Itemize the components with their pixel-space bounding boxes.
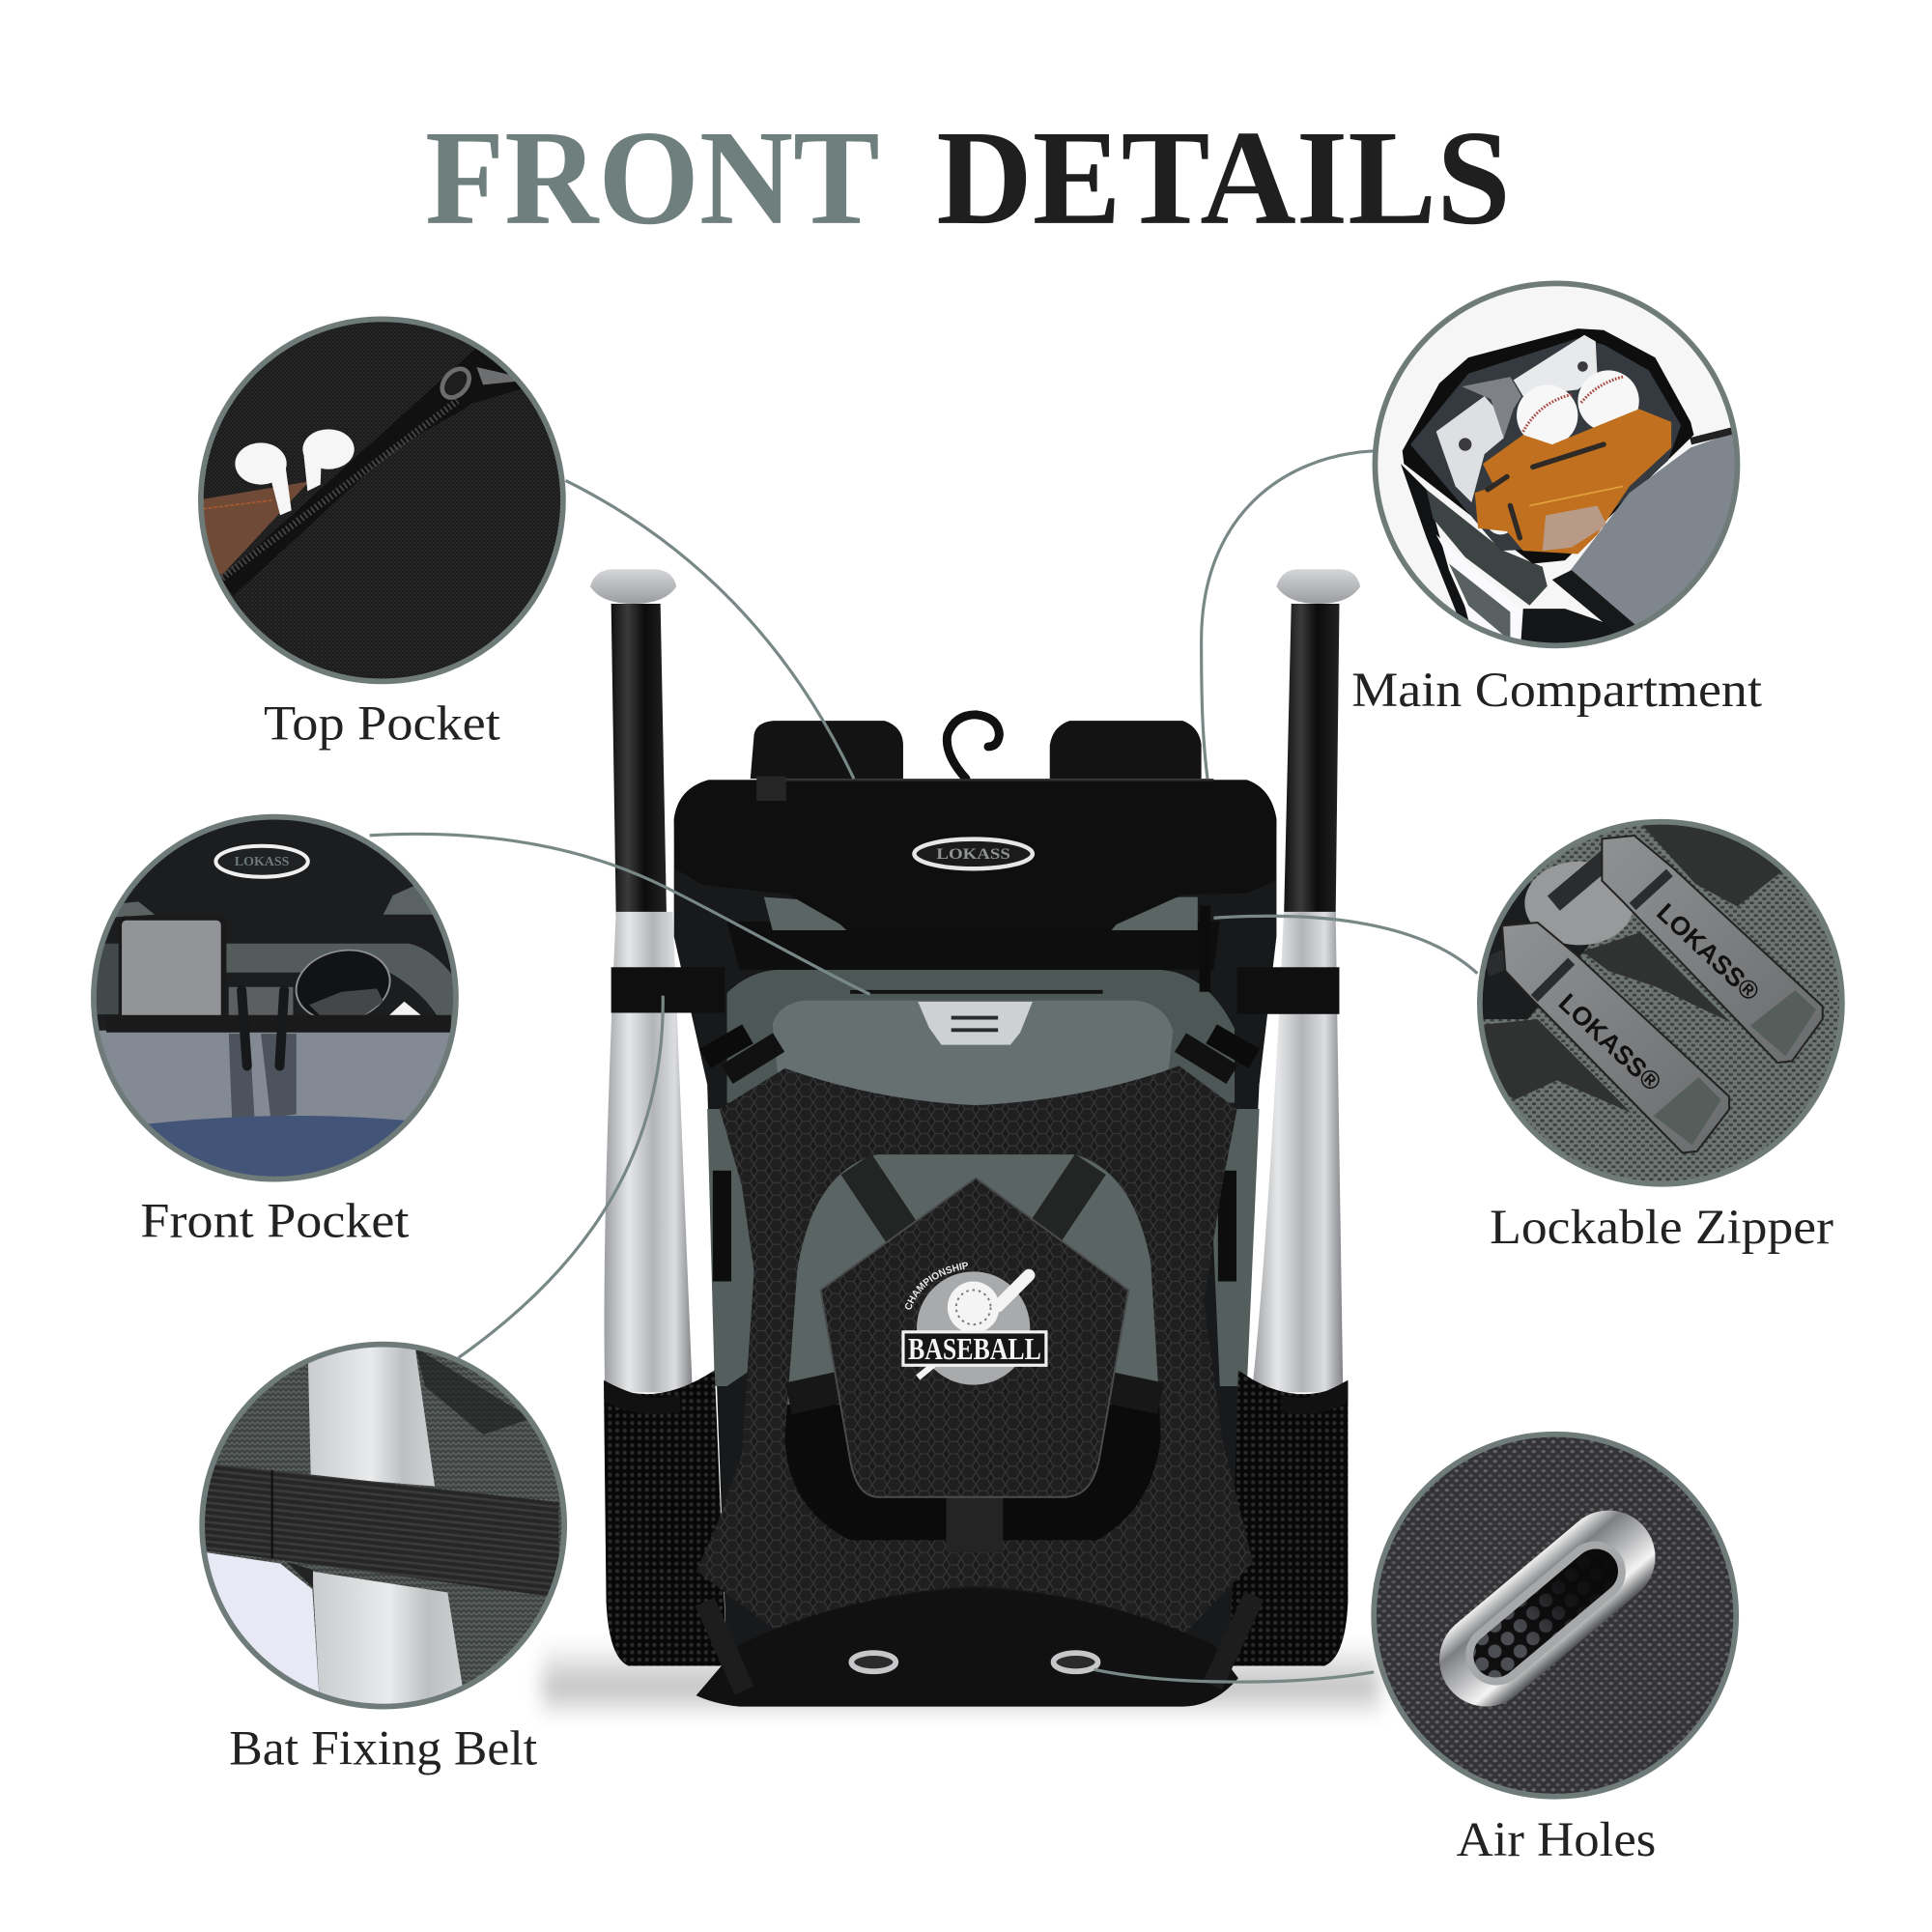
title: DETAILS	[936, 103, 1511, 253]
leather wallet	[203, 481, 307, 575]
white side panel	[193, 1550, 321, 1715]
baseballs	[1486, 370, 1639, 534]
ground shadow	[542, 1641, 1380, 1720]
strap seam	[269, 1470, 275, 1558]
pentagon flap	[820, 1178, 1128, 1497]
grey-green side band	[1427, 490, 1548, 606]
backpack product illustration	[503, 530, 1419, 1739]
pocket edge	[106, 1015, 451, 1033]
grey shoulders	[116, 886, 433, 918]
silver bat lower	[312, 1572, 467, 1715]
tag lower	[1502, 923, 1729, 1152]
panel: main compartment detail	[1372, 280, 1748, 657]
side strap	[1401, 464, 1471, 626]
panel: bat fixing belt detail	[193, 1338, 570, 1715]
connector: air holes	[1094, 1669, 1374, 1682]
pens	[242, 990, 284, 1065]
label: bat fixing belt: Bat Fixing Belt	[229, 1722, 537, 1776]
hardware straps	[1520, 609, 1615, 643]
backpack body	[674, 780, 1276, 1663]
dark upper fabric	[415, 1348, 531, 1435]
zipper tape	[220, 348, 525, 597]
harness opening	[784, 1154, 1161, 1552]
brand oval: LOKASS	[235, 854, 289, 868]
baseball glove	[1475, 409, 1671, 554]
bottom base	[696, 1588, 1238, 1707]
tag upper	[1602, 836, 1823, 1063]
reflective tab	[918, 1002, 1033, 1045]
tag lower: LOKASS®	[1553, 988, 1667, 1097]
connector: front pocket	[370, 834, 870, 994]
opening shade	[1464, 1540, 1627, 1687]
tag upper: LOKASS®	[1651, 897, 1766, 1007]
mesh side pockets	[604, 1370, 1348, 1665]
elastic strap	[193, 1462, 558, 1596]
laptop front	[1436, 396, 1504, 502]
connector: main compartment	[1202, 451, 1374, 779]
title	[425, 103, 1511, 253]
top lid	[674, 780, 1276, 927]
lining folds	[229, 1034, 297, 1118]
phone	[119, 916, 226, 1022]
zipper rings	[1486, 852, 1615, 968]
air hole grommets	[851, 1653, 1097, 1671]
connector: lockable zipper	[1213, 916, 1477, 974]
navy base	[149, 1116, 405, 1177]
top zipper	[756, 777, 1213, 801]
inner slot	[229, 987, 293, 1016]
baseball logo: BASEBALL	[908, 1332, 1041, 1366]
bag shell	[1403, 328, 1693, 563]
baseball logo: CHAMPIONSHIP	[905, 1262, 968, 1310]
compartment interior	[1410, 338, 1681, 551]
panel: front pocket detail	[87, 811, 464, 1188]
grey pocket band	[226, 943, 454, 1026]
grey divider	[1462, 377, 1521, 438]
strap fold	[287, 1562, 313, 1587]
grommet inner rim	[1453, 1529, 1638, 1698]
right bat	[1252, 569, 1360, 1392]
earbuds	[235, 429, 355, 515]
front zipper pull	[1201, 906, 1209, 992]
metal disk	[1524, 862, 1634, 945]
dark band under lid	[727, 922, 1220, 970]
grey wings	[764, 897, 1198, 930]
panel: lockable zipper detail	[1473, 816, 1850, 1193]
lower straps	[705, 1596, 1254, 1690]
title: FRONT	[425, 103, 880, 253]
zipper pull	[440, 367, 516, 400]
honeycomb harness panel	[696, 1065, 1253, 1633]
grey open flap	[1570, 435, 1735, 624]
brand oval	[215, 846, 308, 877]
dark webbing	[1473, 816, 1782, 1113]
pocket lining	[99, 1030, 450, 1124]
zipper teeth	[222, 401, 457, 578]
baseball logo	[901, 1262, 1047, 1385]
silver bat upper	[307, 1338, 435, 1486]
label: air holes: Air Holes	[1457, 1813, 1656, 1867]
hanging hook	[947, 715, 999, 779]
side panels	[707, 1109, 1260, 1386]
left bat	[590, 569, 693, 1392]
laptop back	[1514, 335, 1597, 396]
grey front pocket	[727, 970, 1235, 1109]
label: front pocket: Front Pocket	[140, 1195, 409, 1249]
label: lockable zipper: Lockable Zipper	[1490, 1201, 1833, 1255]
connector: top pocket	[565, 480, 854, 779]
side zippers	[722, 1171, 1227, 1282]
black side	[1473, 881, 1589, 1019]
shoulder straps	[751, 721, 1202, 779]
grey side stripe	[1449, 563, 1510, 640]
brand oval	[914, 839, 1033, 868]
buckles	[699, 1024, 1260, 1074]
flap zipper edge	[1551, 570, 1634, 630]
metal grommet	[1420, 1492, 1674, 1725]
connector: bat fixing belt	[458, 996, 663, 1358]
white side stripe	[1435, 535, 1472, 622]
label: top pocket: Top Pocket	[264, 696, 500, 751]
lower fabric	[235, 410, 464, 597]
label: main compartment: Main Compartment	[1351, 664, 1762, 718]
panel: air holes detail	[1367, 1430, 1744, 1806]
elastic bat belts	[611, 967, 1339, 1014]
brand oval: LOKASS	[936, 846, 1010, 863]
panel: top pocket detail	[193, 314, 570, 691]
sunglasses	[296, 949, 421, 1015]
grommet opening	[1464, 1540, 1627, 1687]
